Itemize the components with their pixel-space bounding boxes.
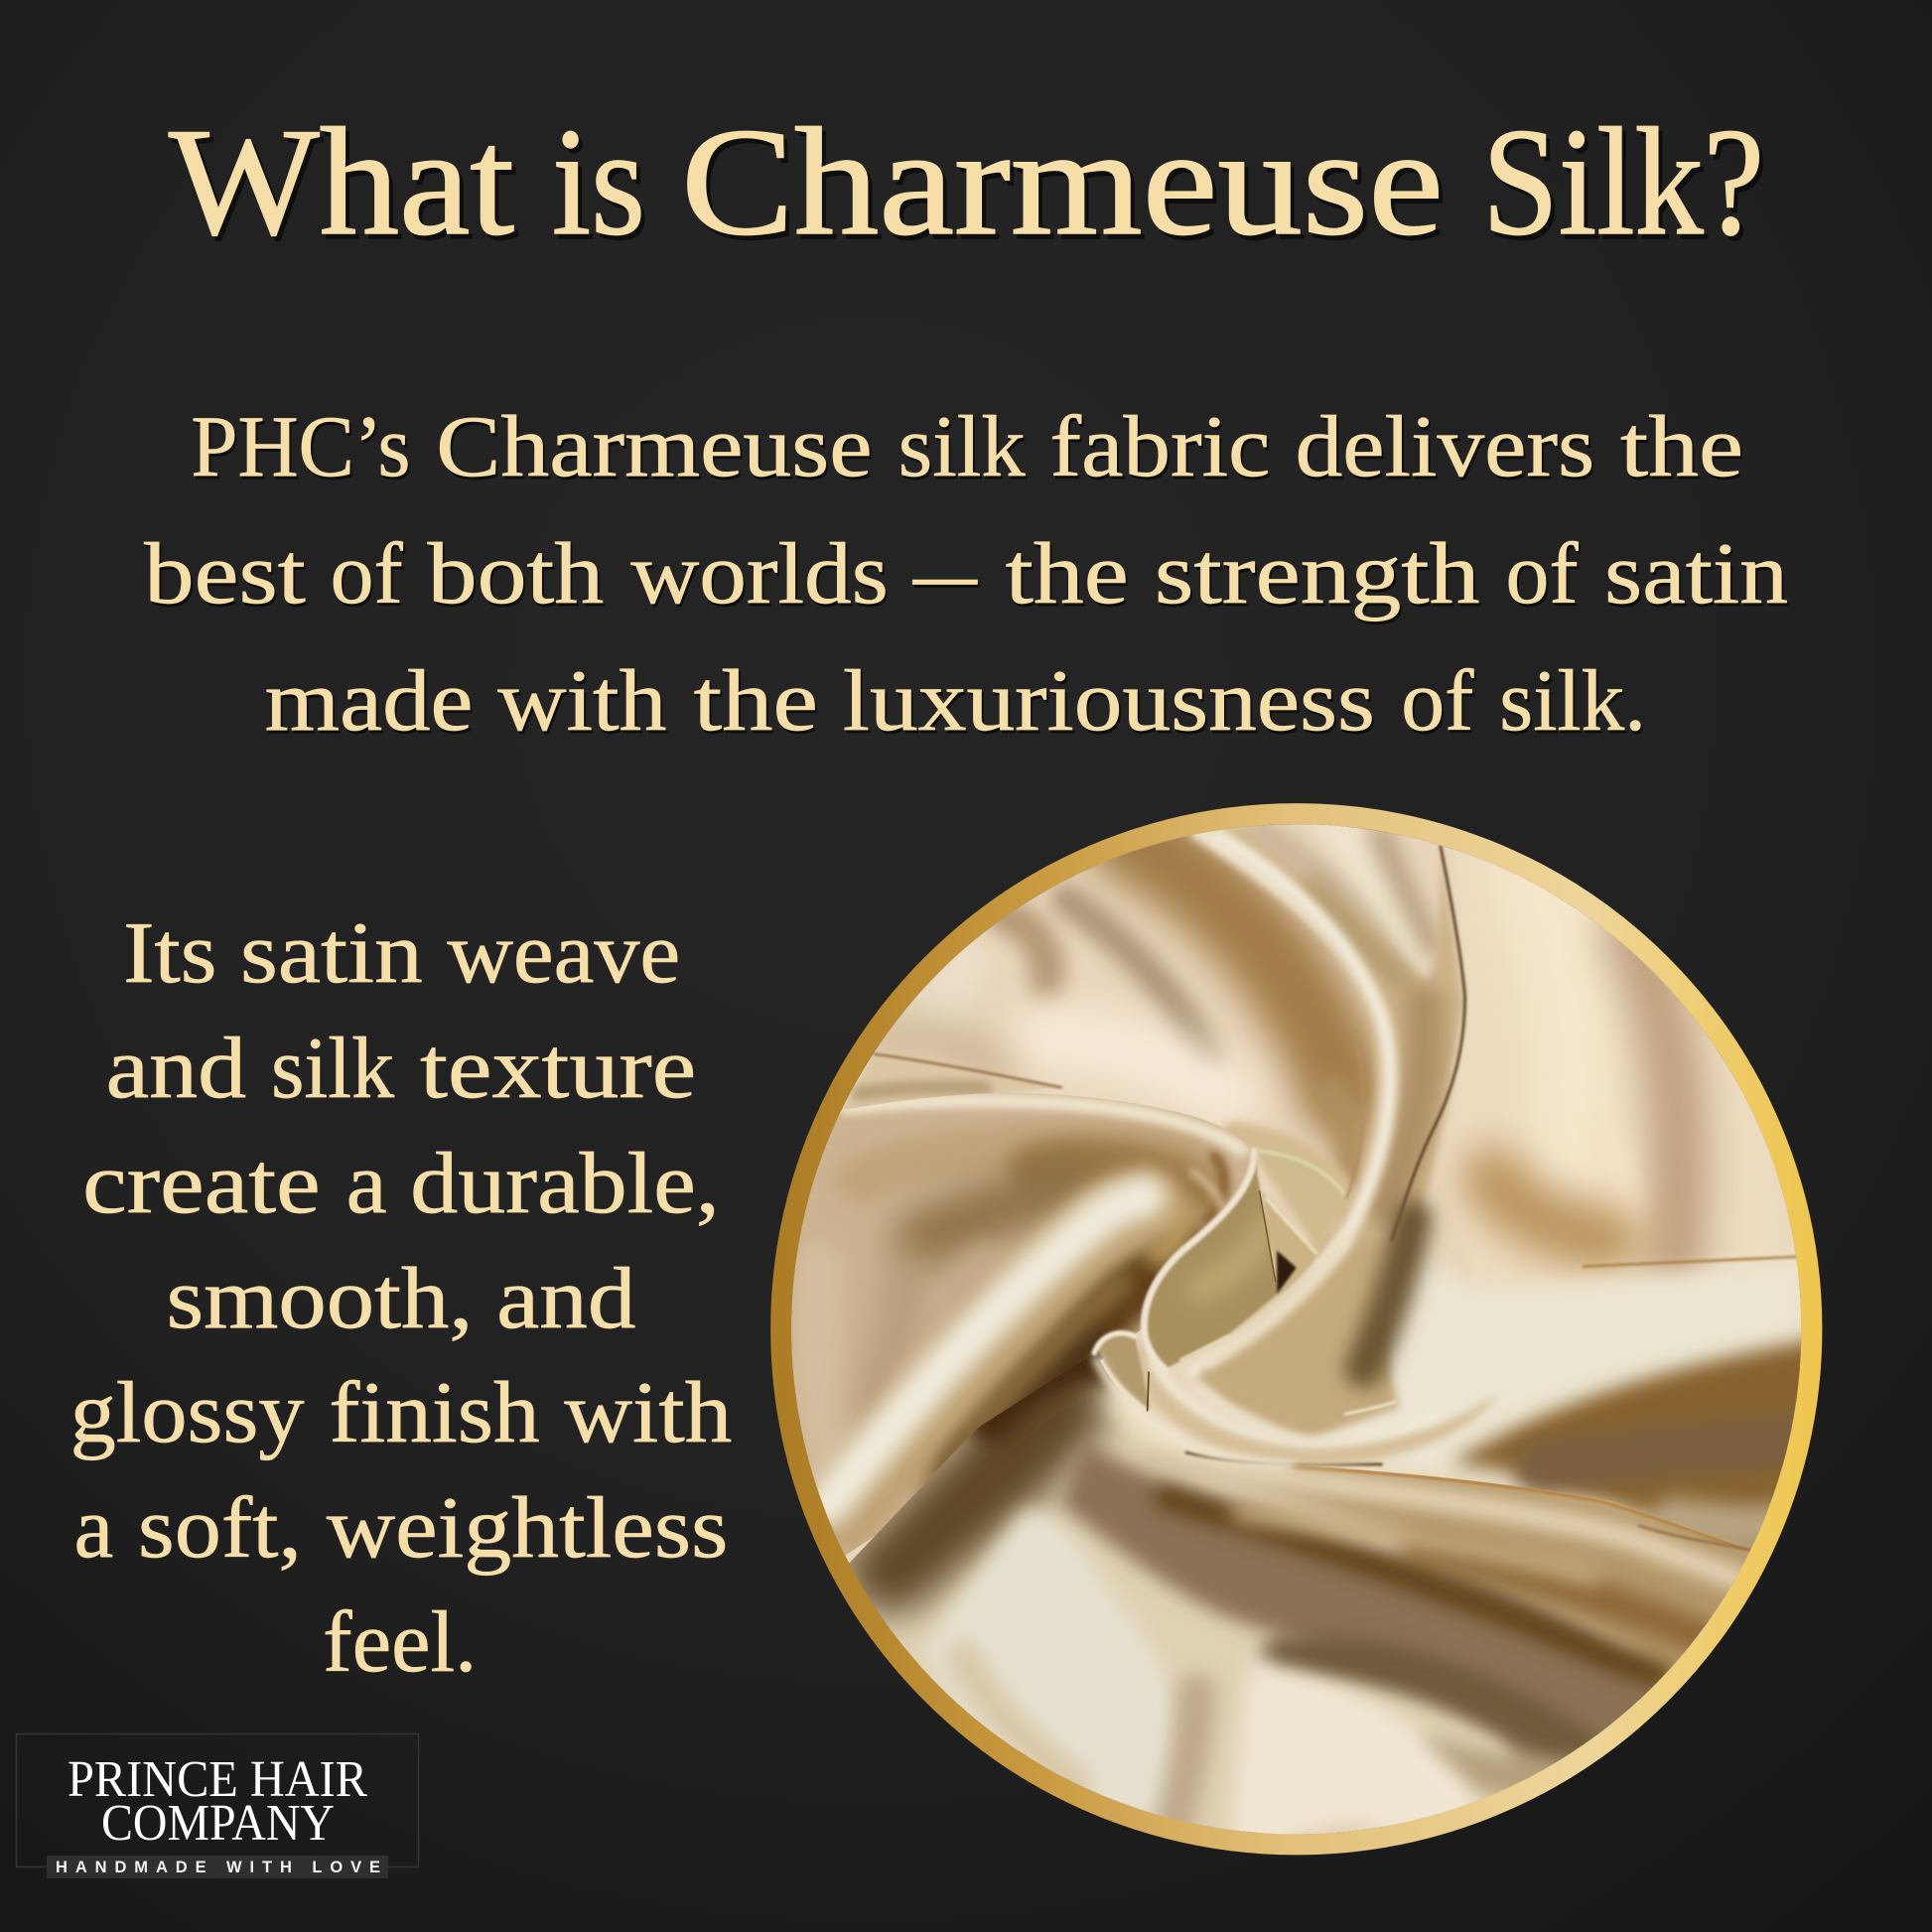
side paragraph: a	[73, 1480, 113, 1577]
right fold	[1193, 1261, 1801, 1550]
intro paragraph: Charmeuse	[436, 399, 873, 495]
logo frame	[16, 1733, 419, 1866]
side paragraph: weave	[447, 905, 680, 1002]
upper ridge	[1131, 1449, 1771, 1686]
lower-right tan	[1501, 1651, 1686, 1783]
intro paragraph: luxuriousness	[843, 653, 1375, 750]
intro paragraph: strength	[1155, 526, 1479, 622]
image: swirled gold silk in round frame	[755, 794, 1847, 1887]
intro paragraph: of	[1401, 653, 1474, 750]
side paragraph: finish	[329, 1365, 540, 1461]
intro paragraph: satin	[1604, 526, 1788, 622]
logo: Prince Hair Company	[16, 1733, 419, 1878]
side paragraph: satin	[240, 905, 423, 1002]
side paragraph: and	[106, 1021, 246, 1117]
side paragraph: texture	[420, 1021, 696, 1117]
title: Charmeuse	[681, 96, 1444, 267]
side paragraph: weightless	[327, 1480, 729, 1577]
intro paragraph: silk	[898, 399, 1026, 495]
side paragraph: smooth,	[167, 1251, 473, 1347]
side paragraph: create	[82, 1136, 321, 1232]
title: What	[169, 96, 514, 267]
intro paragraph: the	[694, 653, 818, 750]
logo wordmark: PRINCE HAIR	[68, 1751, 367, 1808]
side paragraph: durable,	[410, 1136, 720, 1232]
gold ring	[781, 814, 1812, 1845]
upper-left sheet shading	[1131, 836, 1346, 1094]
intro paragraph: of	[1505, 526, 1579, 622]
intro paragraph: made	[265, 653, 473, 750]
small back fold	[1096, 1332, 1150, 1410]
brown band	[1061, 1442, 1688, 1776]
bottom sheet	[849, 1353, 1750, 1835]
side paragraph: silk	[271, 1021, 394, 1117]
intro paragraph: with	[497, 653, 666, 750]
small triangular fold	[842, 1054, 1061, 1110]
intro paragraph: PHC’s	[191, 399, 410, 495]
inner curl	[1142, 1150, 1278, 1369]
side paragraph: and	[496, 1251, 635, 1347]
lower swoop	[1131, 1330, 1500, 1466]
silk fabric	[791, 824, 1801, 1835]
S-shaped fold	[1186, 829, 1463, 1407]
intro paragraph: the	[1006, 526, 1129, 622]
side paragraph	[70, 905, 732, 1691]
intro paragraph: the	[1620, 399, 1743, 495]
side paragraph: with	[564, 1365, 732, 1461]
bottom cream and tan streaks	[1228, 1658, 1493, 1866]
upper-right sheet	[1449, 848, 1799, 1283]
intro paragraph: of	[331, 526, 403, 622]
intro paragraph: both	[428, 526, 604, 622]
dark undercut	[838, 1358, 1110, 1616]
logo wordmark	[68, 1751, 367, 1852]
side paragraph: Its	[123, 905, 216, 1002]
intro paragraph: fabric	[1049, 399, 1270, 495]
intro paragraph	[144, 399, 1788, 750]
intro paragraph: worlds	[630, 526, 889, 622]
title: Silk?	[1482, 96, 1764, 267]
side paragraph: feel.	[323, 1594, 477, 1691]
logo wordmark: COMPANY	[101, 1795, 335, 1852]
title	[169, 96, 1764, 267]
left fold	[791, 1093, 1251, 1556]
intro paragraph: delivers	[1296, 399, 1594, 495]
lower band interior	[1200, 1240, 1399, 1439]
pale lower-left drape	[921, 1510, 1183, 1853]
side paragraph: soft,	[138, 1480, 302, 1577]
side paragraph: glossy	[70, 1365, 304, 1461]
side paragraph: a	[346, 1136, 387, 1232]
title: is	[552, 96, 645, 267]
logo tagline: HANDMADE WITH LOVE	[56, 1859, 380, 1876]
intro paragraph: silk.	[1499, 653, 1646, 750]
intro paragraph: —	[912, 526, 978, 622]
intro paragraph: best	[144, 526, 306, 622]
top centre folds	[1185, 829, 1331, 948]
